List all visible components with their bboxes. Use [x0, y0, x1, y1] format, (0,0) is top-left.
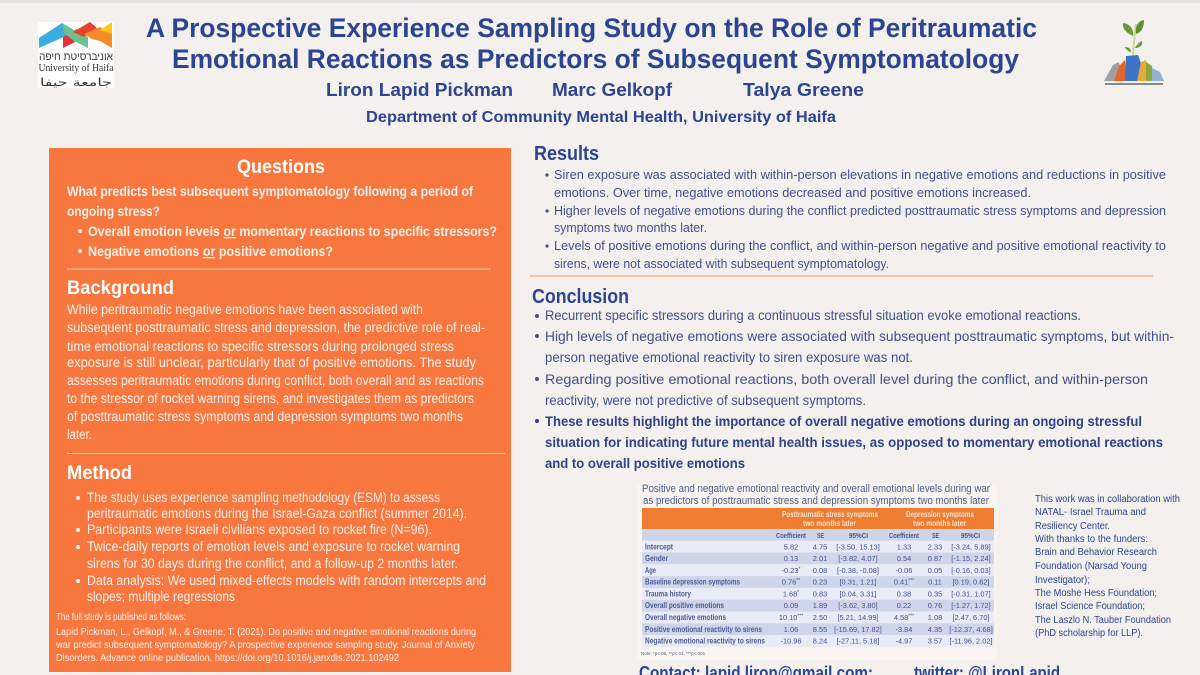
questions section: Overall emotion levels or momentary reactions to specific stressors? — [88, 224, 497, 239]
method section: Twice-daily reports of emotion levels and exposure to rocket warning — [87, 539, 460, 554]
background section: Background — [67, 277, 174, 299]
conclusion section: person negative emotional reactivity to siren exposure was not. — [545, 350, 913, 365]
acknowledgements: With thanks to the funders: — [1035, 534, 1148, 545]
table rows: [-3.24, 5.89] — [951, 542, 991, 551]
table rows: 0.11 — [928, 578, 942, 587]
acknowledgements: Investigator); — [1035, 575, 1090, 586]
table rows: Positive emotional reactivity to sirens — [645, 625, 762, 634]
table rows: [-0.38, -0.08] — [837, 566, 879, 575]
results section: emotions. Over time, negative emotions decreased and positive emotions increased. — [554, 185, 1031, 200]
table rows: [0.31, 1.21] — [840, 578, 876, 587]
table rows: [-0.16, 0.03] — [951, 566, 991, 575]
table rows: 2.50 — [813, 613, 827, 622]
results section: Higher levels of negative emotions during the conflict predicted posttraumatic stress symptoms and depression — [554, 203, 1166, 218]
results section: symptoms two months later. — [554, 220, 707, 235]
acknowledgements: This work was in collaboration with — [1035, 494, 1180, 505]
authors — [326, 80, 864, 100]
table rows: 0.76 — [782, 578, 796, 587]
publication reference: Disorders. Advance online publication. https://doi.org/10.1016/j.janxdis.2021.102492 — [56, 653, 399, 664]
table rows: * — [797, 590, 799, 596]
background section — [67, 277, 505, 454]
background section: to the stressor of rocket warning sirens, and investigates them as predictors — [67, 391, 474, 406]
title: A Prospective Experience Sampling Study on the Role of Peritraumatic — [146, 13, 1037, 43]
table rows: [-3.50, 15.13] — [836, 542, 880, 551]
acknowledgements — [1035, 494, 1180, 639]
table title: as predictors of posttraumatic stress and depression symptoms two months later — [643, 495, 989, 507]
table rows: [-27.11, 5.18] — [836, 636, 880, 646]
table rows: 0.05 — [928, 566, 942, 575]
table rows: 0.23 — [813, 578, 827, 587]
results section: sirens, were not associated with subsequent symptomatology. — [554, 256, 889, 271]
table rows: [-15.69, 17.82] — [834, 625, 882, 634]
table header: Depression symptoms — [906, 510, 974, 519]
results section: Levels of positive emotions during the conflict, and within-person negative and positive emotional reactivity to — [554, 238, 1166, 253]
logo: University of Haifa — [38, 22, 114, 89]
conclusion section — [532, 286, 1174, 471]
table note: Note: *p<.05, **p<.01, ***p<.001 — [641, 651, 706, 656]
questions section: Questions — [237, 156, 325, 178]
table rows: Trauma history — [645, 589, 691, 598]
table rows: 0.76 — [928, 601, 942, 610]
table rows: [-3.82, 4.07] — [838, 554, 878, 563]
conclusion section: and to overall positive emotions — [545, 456, 745, 471]
method section: Method — [67, 462, 132, 484]
table rows: 4.58 — [894, 613, 908, 622]
table rows: [-12.37, 4.68] — [949, 625, 993, 634]
table rows — [642, 541, 994, 647]
table rows: Gender — [645, 554, 668, 563]
table header: SE — [932, 531, 939, 540]
table header: two months later — [913, 519, 966, 528]
table rows: 1.06 — [784, 625, 798, 634]
table rows: *** — [797, 614, 803, 620]
table rows: Baseline depression symptoms — [645, 578, 740, 587]
questions section: Negative emotions or positive emotions? — [88, 244, 333, 259]
method section — [67, 462, 486, 604]
method section: slopes; multiple regressions — [87, 589, 235, 604]
background section: subsequent posttraumatic stress and depression, the predictive role of real- — [67, 320, 485, 335]
table rows: 5.82 — [784, 542, 798, 551]
table rows: 0.87 — [928, 554, 942, 563]
table rows: *** — [908, 578, 914, 584]
logo: NATAL plant and hands — [1104, 20, 1164, 85]
table rows: 2.33 — [928, 542, 942, 551]
table rows: [5.21, 14.99] — [837, 613, 879, 622]
table rows: -4.97 — [896, 636, 912, 646]
table rows: Intercept — [645, 542, 673, 551]
table header: SE — [817, 531, 824, 540]
table rows: 8.55 — [813, 625, 827, 634]
results section: Siren exposure was associated with within-person elevations in negative emotions and reductions in positive — [554, 167, 1166, 182]
table rows: *** — [908, 614, 914, 620]
table rows: 0.54 — [897, 554, 911, 563]
table rows: 1.08 — [928, 613, 942, 622]
conclusion section: These results highlight the importance of overall negative emotions during an ongoing stressful — [545, 414, 1142, 429]
table title — [642, 483, 990, 507]
background section: exposure is still unclear, particularly that of positive emotions. The study — [67, 355, 476, 370]
logo: University of Haifa: University of Haifa — [38, 63, 114, 74]
method section: sirens for 30 days during the conflict, and a follow-up 2 months later. — [87, 556, 458, 571]
title: Emotional Reactions as Predictors of Subsequent Symptomatology — [172, 44, 1019, 74]
table rows: -0.06 — [896, 566, 912, 575]
table rows: Age — [645, 566, 656, 575]
table rows: [0.04, 3.31] — [840, 589, 876, 598]
table rows: 2.01 — [813, 554, 827, 563]
table rows: 10.10 — [779, 613, 797, 622]
acknowledgements: NATAL- Israel Trauma and — [1035, 507, 1146, 518]
background section: While peritraumatic negative emotions have been associated with — [67, 302, 423, 317]
regression table — [637, 483, 997, 660]
questions section: ongoing stress? — [67, 204, 160, 219]
table rows: 3.57 — [928, 636, 942, 646]
table rows: [2.47, 6.70] — [953, 613, 989, 622]
table rows: [-1.15, 2.24] — [951, 554, 991, 563]
table header: 95%CI — [849, 531, 868, 540]
authors: Marc Gelkopf — [552, 80, 673, 100]
table rows: 0.38 — [897, 589, 911, 598]
table rows: [-1.27, 1.72] — [951, 601, 991, 610]
acknowledgements: Brain and Behavior Research — [1035, 547, 1157, 558]
table header: Posttraumatic stress symptoms — [782, 510, 878, 519]
table rows: Overall negative emotions — [645, 613, 726, 622]
table rows: Negative emotional reactivity to sirens — [645, 636, 765, 646]
table rows: [-0.31, 1.07] — [951, 589, 991, 598]
table rows: 0.09 — [784, 601, 798, 610]
method section: Data analysis: We used mixed-effects models with random intercepts and — [87, 573, 486, 588]
conclusion section: Recurrent specific stressors during a continuous stressful situation evoke emotional reactions. — [545, 308, 1081, 323]
acknowledgements: The Moshe Hess Foundation; — [1035, 588, 1157, 599]
table rows: 1.89 — [813, 601, 827, 610]
table rows: -0.23 — [782, 566, 798, 575]
table header: Coefficient — [889, 531, 919, 540]
conclusion section: Conclusion — [532, 286, 629, 308]
conclusion section: High levels of negative emotions were associated with subsequent posttraumatic symptoms, but within- — [545, 329, 1174, 344]
background section: of posttraumatic stress symptoms and depression symptoms two months — [67, 409, 463, 424]
table rows: ** — [796, 578, 800, 584]
table rows: 0.35 — [928, 589, 942, 598]
table header: 95%CI — [961, 531, 980, 540]
table rows: * — [798, 566, 800, 572]
table rows: 4.75 — [813, 542, 827, 551]
logo: University of Haifa: אוניברסיטת חיפה — [39, 51, 113, 63]
contact line — [639, 663, 1060, 675]
table rows: 0.41 — [894, 578, 908, 587]
table rows: -3.84 — [896, 625, 912, 634]
questions section: What predicts best subsequent symptomatology following a period of — [67, 184, 473, 199]
table rows: 4.35 — [928, 625, 942, 634]
table header: Coefficient — [776, 531, 806, 540]
table header: two months later — [803, 519, 856, 528]
authors: Liron Lapid Pickman — [326, 80, 513, 100]
questions section — [67, 156, 497, 270]
method section: The study uses experience sampling methodology (ESM) to assess — [87, 490, 440, 505]
table rows: [0.19, 0.62] — [953, 578, 989, 587]
table title: Positive and negative emotional reactivity and overall emotional levels during war — [642, 483, 990, 495]
publication reference: war predict subsequent symptomatology? A prospective experience sampling study. Journal of Anxiety — [55, 640, 475, 651]
authors: Talya Greene — [743, 80, 864, 100]
conclusion section: situation for indicating future mental health issues, as opposed to momentary emotional reactions — [545, 435, 1163, 450]
publication reference — [55, 612, 476, 664]
publication reference: The full study is published as follows: — [56, 612, 186, 623]
table rows: 0.22 — [897, 601, 911, 610]
table rows: 1.68 — [783, 589, 797, 598]
publication reference: Lapid Pickman, L., Gelkopf, M., & Greene, T. (2021). Do positive and negative emotional reactions during — [56, 627, 476, 638]
table rows: [-11.96, 2.02] — [949, 636, 993, 646]
table rows: 0.13 — [784, 554, 798, 563]
title — [146, 13, 1037, 74]
panel: orange left column — [49, 148, 511, 672]
table rows: Overall positive emotions — [645, 601, 724, 610]
table rows: 0.83 — [813, 589, 827, 598]
department: Department of Community Mental Health, University of Haifa — [366, 109, 836, 126]
acknowledgements: Israel Science Foundation; — [1035, 601, 1145, 612]
table rows: -10.96 — [781, 636, 801, 646]
acknowledgements: Foundation (Narsad Young — [1035, 561, 1147, 572]
results section — [530, 143, 1166, 276]
results section: Results — [534, 143, 599, 165]
background section: assesses peritraumatic emotions during conflict, both overall and as reactions — [67, 373, 484, 388]
acknowledgements: (PhD scholarship for LLP). — [1035, 628, 1143, 639]
background section: later. — [67, 427, 92, 442]
method section: peritraumatic emotions during the Israel-Gaza conflict (summer 2014). — [87, 506, 467, 521]
logo: University of Haifa: جامعة حيفا — [40, 76, 112, 89]
acknowledgements: Resiliency Center. — [1035, 521, 1110, 532]
table rows: 0.08 — [813, 566, 827, 575]
background section: time emotional reactions to specific stressors during prolonged stress — [67, 339, 454, 354]
table rows: [-3.62, 3.80] — [838, 601, 878, 610]
table rows: 8.24 — [813, 636, 827, 646]
table rows: 1.33 — [897, 542, 911, 551]
method section: Participants were Israeli civilians exposed to rocket fire (N=96). — [87, 522, 432, 537]
table header — [642, 508, 994, 541]
conclusion section: Regarding positive emotional reactions, both overall level during the conflict, and within-person — [545, 372, 1148, 387]
acknowledgements: The Laszlo N. Tauber Foundation — [1035, 615, 1171, 626]
conclusion section: reactivity, were not predictive of subsequent symptoms. — [545, 393, 866, 408]
